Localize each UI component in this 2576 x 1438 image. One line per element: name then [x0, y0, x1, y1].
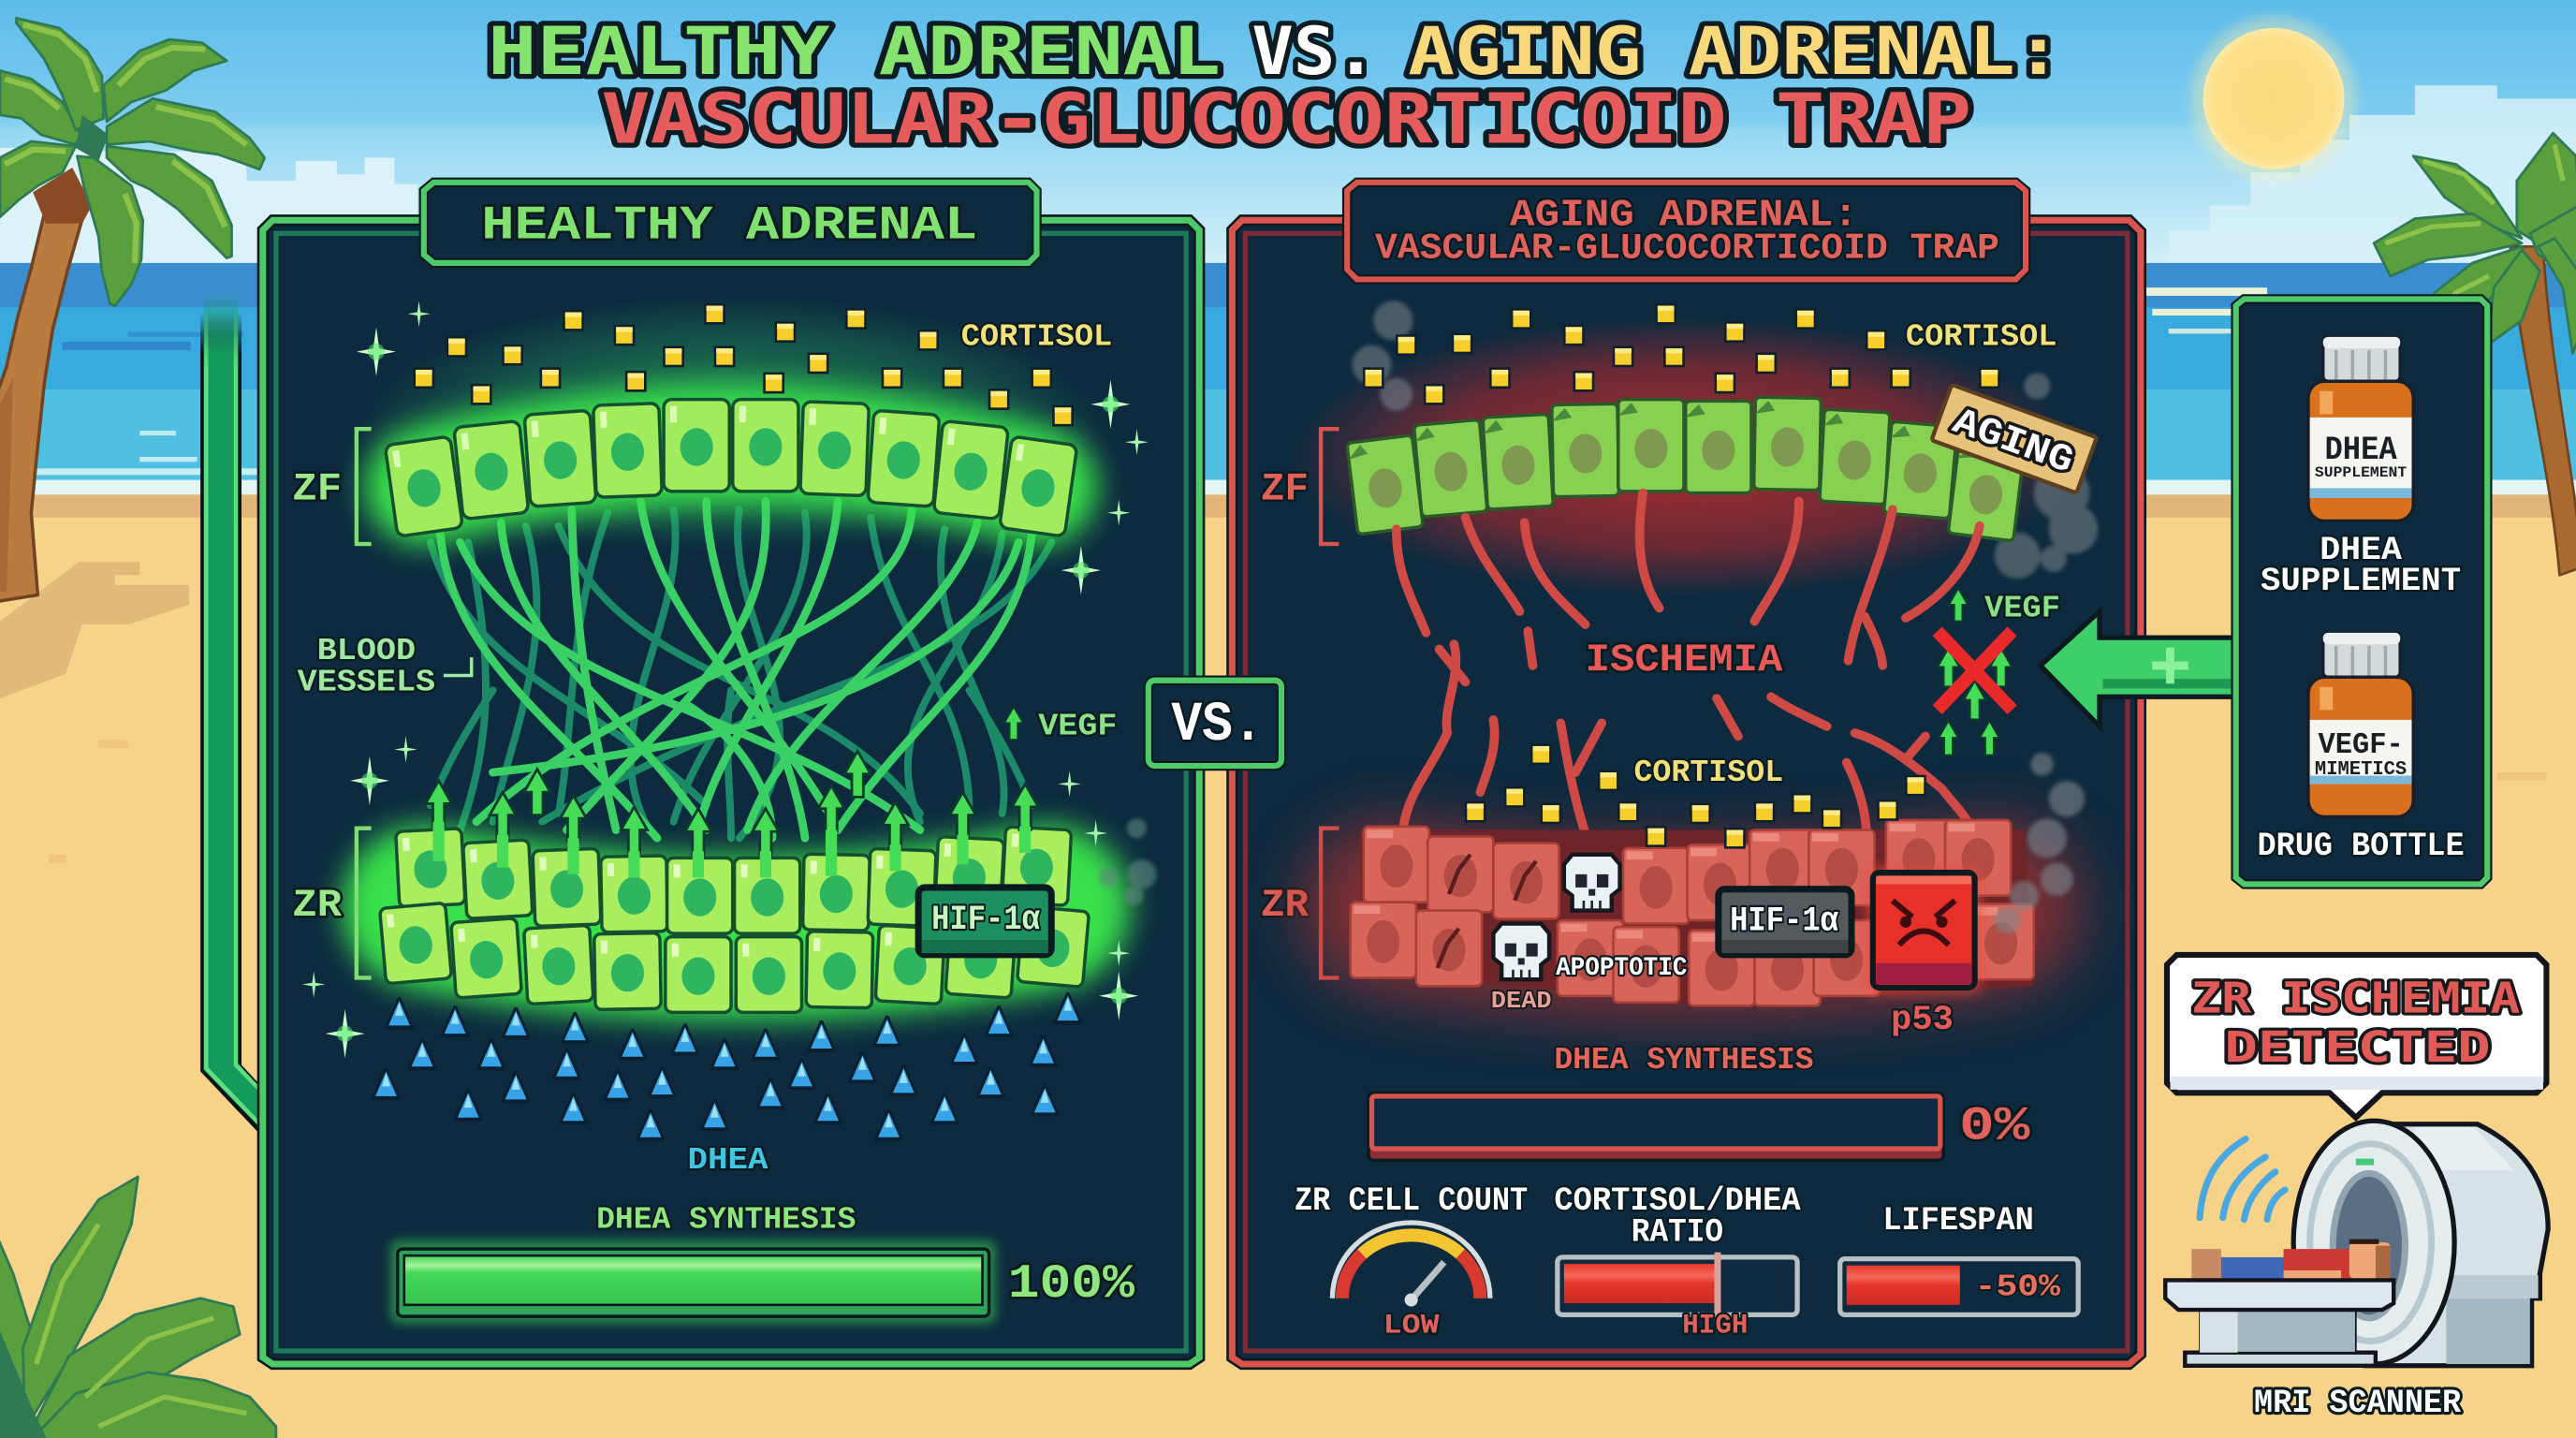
title: healthy adrenal: HEALTHY ADRENAL	[488, 13, 1221, 90]
heading tab: aging adrenal	[1347, 183, 2026, 279]
icon: DHEA supplement bottle: DHEA	[2324, 432, 2398, 469]
smoke near ZR	[1995, 753, 2085, 933]
DHEA synthesis label: DHEA SYNTHESIS	[596, 1202, 856, 1238]
HIF-1 alpha label	[918, 888, 1051, 955]
ischemia label: ISCHEMIA	[1586, 638, 1783, 682]
connector pipe into healthy panel	[200, 292, 263, 1137]
metric: ZR cell count gauge: ZR CELL COUNT	[1295, 1182, 1528, 1220]
DHEA droplets	[373, 994, 1080, 1139]
right palm tree	[2374, 133, 2576, 575]
heading tab: aging adrenal: AGING ADRENAL:	[1510, 194, 1858, 237]
metric: cortisol/DHEA ratio bar: RATIO	[1632, 1213, 1723, 1251]
metric: cortisol/DHEA ratio bar: CORTISOL/DHEA	[1554, 1182, 1801, 1220]
main title	[488, 13, 2062, 160]
lower cortisol label: CORTISOL	[1633, 756, 1783, 791]
p53 label: p53	[1891, 1001, 1954, 1040]
ZF bracket and label	[292, 429, 372, 544]
DHEA synthesis bar: 100%	[391, 1240, 996, 1323]
icon: VEGF-mimetics bottle: MIMETICS	[2315, 758, 2407, 781]
heading tab: healthy adrenal	[424, 183, 1036, 263]
VEGF label with arrow	[1004, 707, 1117, 745]
DHEA supplement label	[2261, 532, 2461, 600]
DHEA synthesis label: DHEA SYNTHESIS	[1554, 1043, 1814, 1078]
skull: apoptotic cell	[1564, 855, 1620, 911]
dead label: DEAD	[1491, 987, 1552, 1015]
icon: VEGF-mimetics bottle	[2308, 633, 2413, 816]
lower cortisol particles	[1465, 743, 1926, 849]
icon: VEGF-mimetics bottle: VEGF-	[2318, 729, 2404, 762]
scanner front ring	[2293, 1121, 2454, 1364]
metric: lifespan bar: LIFESPAN	[1882, 1202, 2034, 1240]
halo above zona fasciculata	[361, 296, 1101, 552]
arrow: treatment into aging panel	[2041, 611, 2244, 726]
HIF-1 alpha label: HIF-1α	[1730, 902, 1839, 942]
sun	[2191, 17, 2356, 181]
smoke around ZF	[1352, 301, 2098, 579]
title: vs: VS.	[1251, 13, 1377, 90]
ZR bracket and label: ZR	[1261, 883, 1310, 928]
AGING tag	[1931, 385, 2097, 493]
title: aging adrenal: AGING ADRENAL:	[1408, 13, 2062, 90]
panel: healthy adrenal	[263, 183, 1199, 1364]
icon: DHEA supplement bottle	[2308, 337, 2413, 521]
skull: dead cell	[1493, 924, 1549, 979]
red X	[1942, 636, 2008, 705]
HIF-1 alpha label: HIF-1α	[931, 901, 1041, 940]
metric: cortisol/DHEA ratio bar	[1554, 1182, 1801, 1342]
metric: ZR cell count gauge	[1295, 1182, 1528, 1342]
cortisol particles	[1363, 303, 2000, 405]
faint smoke near ZR	[1099, 818, 1157, 905]
icon: DHEA supplement bottle: SUPPLEMENT	[2315, 464, 2407, 481]
DHEA supplement label: SUPPLEMENT	[2261, 563, 2461, 600]
VS badge	[1149, 681, 1281, 766]
callout: ZR ischemia detected: ZR ISCHEMIA	[2191, 973, 2520, 1022]
ZF bracket and label: ZF	[292, 467, 342, 512]
metric: lifespan bar: -50%	[1975, 1269, 2061, 1305]
scanner signal waves	[2200, 1139, 2285, 1220]
damaged zona fasciculata cells	[1347, 397, 2025, 541]
scanner body	[2365, 1124, 2548, 1366]
MRI scanner label: MRI SCANNER	[2254, 1385, 2462, 1422]
ZR bracket and label	[292, 829, 372, 977]
blood vessels label: VESSELS	[298, 665, 435, 700]
drug bottle label: DRUG BOTTLE	[2258, 828, 2465, 865]
ZR bracket and label: ZR	[292, 883, 343, 928]
callout: ZR ischemia detected: DETECTED	[2224, 1022, 2491, 1072]
sparkles	[302, 301, 1149, 1058]
zona fasciculata cells	[385, 400, 1077, 536]
cortisol particles	[413, 303, 1074, 427]
blood vessels label	[298, 634, 472, 700]
metric: lifespan bar	[1840, 1202, 2078, 1314]
0 percent value: 0%	[1959, 1101, 2030, 1154]
VS badge: VS.	[1171, 693, 1264, 756]
title: vascular-glucocorticoid trap: VASCULAR-GLUCOCORTICOID TRAP	[601, 81, 1971, 160]
DHEA label: DHEA	[688, 1143, 769, 1179]
red inflammatory glow around ZF	[1290, 317, 2078, 596]
icon: MRI scanner with patient	[2165, 1121, 2548, 1366]
broken red vessels	[1397, 493, 1980, 858]
bottom-left palm fronds	[0, 1177, 276, 1438]
heading tab: aging adrenal: VASCULAR-GLUCOCORTICOID TRAP	[1375, 228, 1999, 270]
100 percent value: 100%	[1008, 1258, 1134, 1312]
panel: aging adrenal	[1232, 183, 2141, 1364]
cortisol label: CORTISOL	[961, 320, 1112, 356]
heading tab: healthy adrenal: HEALTHY ADRENAL	[481, 200, 977, 254]
AGING tag: AGING	[1947, 401, 2079, 484]
panel: interventions	[2236, 299, 2487, 884]
VEGF label with arrow	[1949, 588, 2060, 626]
callout: ZR ischemia detected	[2167, 955, 2546, 1118]
DHEA synthesis bar: 0%	[1368, 1093, 1943, 1160]
table top	[2165, 1280, 2393, 1310]
red glow around ZR	[1388, 907, 1996, 932]
ZF bracket and label: ZF	[1261, 467, 1309, 512]
left palm tree	[0, 18, 265, 601]
metric: cortisol/DHEA ratio bar: HIGH	[1682, 1310, 1748, 1342]
cortisol label: CORTISOL	[1906, 320, 2056, 356]
p53 angry face icon	[1866, 866, 1982, 994]
blood vessels label: BLOOD	[317, 634, 416, 669]
VEGF label with arrow: VEGF	[1038, 710, 1117, 745]
apoptotic label: APOPTOTIC	[1556, 954, 1688, 983]
VEGF blocked group	[1938, 588, 2060, 756]
metric: ZR cell count gauge: LOW	[1383, 1310, 1440, 1342]
patient on table	[2191, 1240, 2391, 1280]
VEGF label with arrow: VEGF	[1984, 591, 2060, 626]
blood vessels network	[431, 501, 1051, 838]
HIF-1 alpha label	[1719, 889, 1852, 955]
table pedestal	[2185, 1308, 2376, 1366]
VEGF up arrows	[426, 751, 1038, 877]
ZR bracket and label	[1261, 829, 1339, 977]
zona reticularis glow and cells	[380, 827, 1090, 1012]
ZF bracket and label	[1261, 429, 1339, 544]
dying zona reticularis cells	[1351, 820, 2034, 1005]
DHEA supplement label: DHEA	[2320, 532, 2403, 569]
